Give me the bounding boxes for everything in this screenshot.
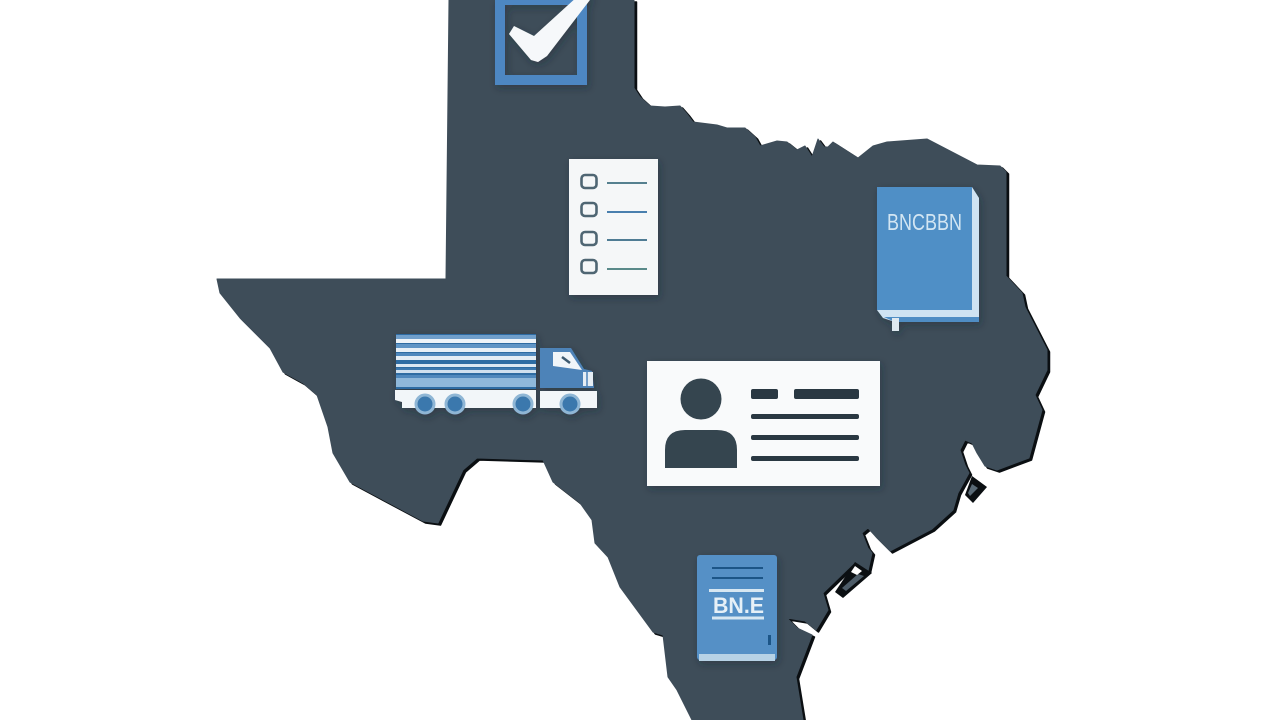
coastal barrier island upper (965, 476, 987, 503)
icon: small blue booklet (697, 555, 777, 661)
ID photo silhouette (665, 378, 737, 468)
icon: checklist document (569, 159, 658, 295)
ID text lines (751, 389, 859, 461)
icon: checkbox with check mark (495, 0, 593, 85)
coastal barrier island lower (835, 562, 872, 598)
icon: blue handbook (877, 187, 979, 331)
truck cab (540, 348, 597, 408)
truck wheels (416, 395, 579, 413)
handbook title: BNCBBN (887, 209, 962, 235)
booklet title: BN.E (713, 593, 764, 618)
icon: ID card (647, 361, 880, 486)
truck cargo box (396, 334, 536, 389)
truck chassis (395, 390, 536, 408)
map: Texas outline (217, 0, 1050, 720)
icon: delivery truck (395, 334, 597, 413)
